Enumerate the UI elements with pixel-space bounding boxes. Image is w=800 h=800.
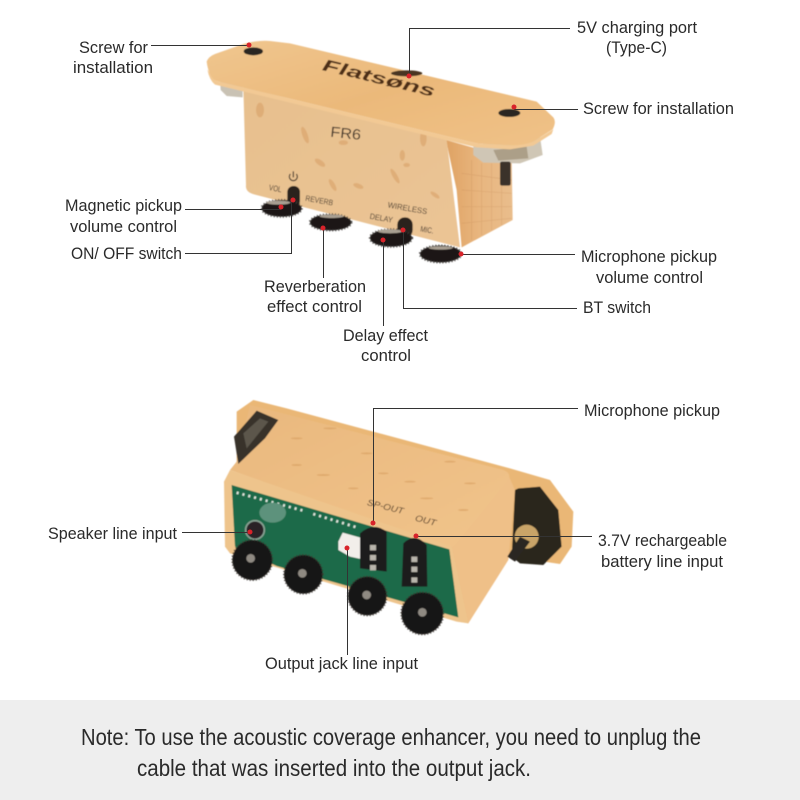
right screw bbox=[498, 109, 520, 117]
label: battery line input: 3.7V rechargeable bbox=[598, 531, 727, 550]
panel marking REVERB: REVERB bbox=[305, 194, 334, 207]
photo: top device FR6 bbox=[207, 41, 555, 262]
green circuit board bbox=[232, 485, 458, 617]
right bracket bbox=[512, 487, 562, 565]
label: delay control: control bbox=[361, 346, 411, 365]
wood grain flecks bbox=[291, 427, 476, 511]
bracket highlight bbox=[243, 418, 268, 448]
plate front edge bbox=[207, 69, 553, 149]
label: screw for installation (left): installation bbox=[73, 58, 153, 77]
block front wood frame bbox=[224, 470, 468, 623]
jack pins bbox=[370, 545, 376, 570]
label: microphone pickup volume bbox=[581, 247, 717, 287]
back plate bbox=[237, 400, 573, 564]
left dark bracket bbox=[234, 411, 278, 464]
knob caps bbox=[266, 201, 453, 250]
label: reverberation control: effect control bbox=[267, 297, 362, 316]
mounting bolt bbox=[500, 162, 511, 186]
label: speaker line input: Speaker line input bbox=[48, 524, 177, 543]
OUT marking: OUT bbox=[414, 513, 438, 528]
note text: cable that was inserted into the output jack. bbox=[137, 755, 531, 781]
label: battery line input bbox=[598, 531, 727, 571]
panel marking VOL: VOL bbox=[268, 183, 283, 194]
SP-OUT marking: SP-OUT bbox=[366, 497, 406, 516]
pcb silk circle bbox=[259, 503, 286, 523]
label: screw for installation (right): Screw for installation bbox=[583, 99, 734, 118]
label: charging port bbox=[577, 18, 697, 57]
label: reverberation control: Reverberation bbox=[264, 277, 366, 296]
knobs bbox=[262, 200, 461, 262]
jack pins bbox=[411, 557, 417, 583]
charging port bbox=[391, 70, 422, 76]
jack body bbox=[360, 527, 387, 572]
label: delay control: Delay effect bbox=[343, 326, 428, 345]
note text bbox=[81, 724, 701, 781]
panel marking WIRELESS: WIRELESS bbox=[387, 200, 428, 216]
label: screw for installation (left) bbox=[73, 38, 153, 77]
left clear bracket bbox=[220, 80, 243, 97]
model name: FR6 bbox=[330, 125, 362, 144]
note background bbox=[0, 700, 800, 800]
label: charging port: (Type-C) bbox=[606, 38, 667, 57]
pcb pad row bbox=[237, 493, 357, 527]
panel marking MIC: MIC. bbox=[420, 224, 434, 236]
knob centres bbox=[246, 554, 427, 617]
note band bbox=[0, 700, 800, 800]
label: battery line input: battery line input bbox=[601, 552, 723, 571]
OUT jack bbox=[402, 538, 427, 587]
left screw bbox=[244, 47, 263, 55]
right clear bracket bbox=[473, 137, 543, 163]
label: output jack line input: Output jack line input bbox=[265, 654, 418, 673]
red marker dots bbox=[246, 42, 516, 550]
label: on/off switch: ON/ OFF switch bbox=[71, 244, 182, 263]
bracket dark patch bbox=[493, 147, 528, 161]
label: microphone pickup: Microphone pickup bbox=[584, 401, 720, 420]
wood grain flecks bbox=[256, 103, 441, 200]
jack body bbox=[402, 538, 427, 587]
label: microphone pickup volume: volume control bbox=[596, 268, 703, 287]
logo: Flatsøns bbox=[321, 55, 437, 101]
knobs bbox=[232, 540, 443, 634]
label: BT switch: BT switch bbox=[583, 298, 651, 317]
panel marking DELAY: DELAY bbox=[369, 212, 394, 225]
power switch bbox=[287, 186, 300, 207]
microphone capsule bbox=[246, 521, 264, 539]
bolt bbox=[507, 537, 530, 562]
block top face bbox=[230, 405, 509, 547]
top wooden plate bbox=[207, 41, 555, 145]
photo: bottom device with circuit board bbox=[224, 400, 573, 634]
note text: Note: To use the acoustic coverage enhancer, you need to unplug the bbox=[81, 724, 701, 750]
label: magnetic pickup volume: Magnetic pickup bbox=[65, 196, 182, 215]
label: delay control bbox=[343, 326, 428, 365]
label: magnetic pickup volume bbox=[65, 196, 182, 236]
label: magnetic pickup volume: volume control bbox=[70, 217, 177, 236]
block side bbox=[450, 475, 515, 623]
leader lines bbox=[151, 28, 592, 655]
wireless switch bbox=[397, 217, 413, 237]
side wood grid texture bbox=[462, 160, 512, 240]
bolt washer bbox=[515, 525, 539, 549]
white connector bbox=[338, 533, 368, 561]
label: microphone pickup volume: Microphone pickup bbox=[581, 247, 717, 266]
label: charging port: 5V charging port bbox=[577, 18, 697, 37]
power icon bbox=[289, 171, 297, 181]
SP-OUT jack bbox=[360, 527, 387, 572]
label: screw for installation (left): Screw for bbox=[79, 38, 148, 57]
label: reverberation control bbox=[264, 277, 366, 316]
body right side bbox=[446, 140, 513, 247]
body front face bbox=[243, 87, 460, 247]
